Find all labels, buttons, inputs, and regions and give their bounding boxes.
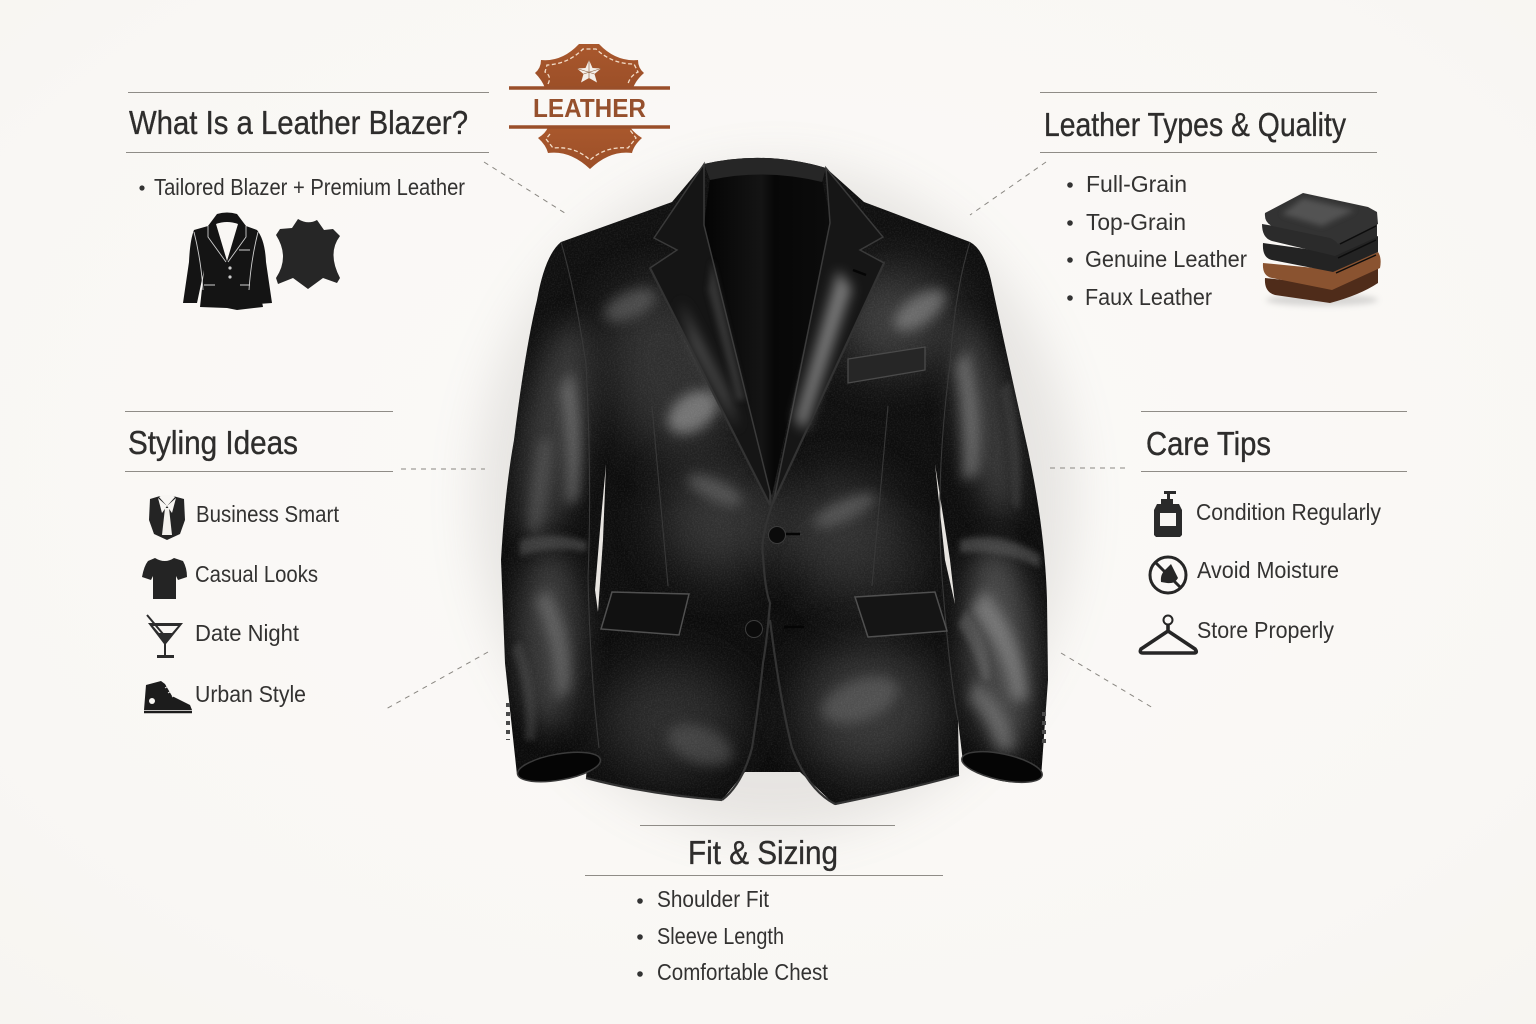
star	[577, 60, 601, 82]
icon: folded leather stack	[1262, 193, 1381, 306]
icon: sneaker	[144, 681, 192, 712]
item: casual looks: Casual Looks	[195, 561, 318, 587]
panel: leather types and quality	[1040, 92, 1381, 310]
jacket shadow	[475, 165, 1075, 835]
text block: Tailored Blazer + Premium Leather	[154, 174, 465, 200]
heading: Fit & Sizing	[688, 834, 838, 871]
item: avoid moisture: Avoid Moisture	[1197, 557, 1339, 583]
item: urban style	[144, 681, 306, 712]
shirt lining	[704, 172, 832, 495]
lapel stitching and front edges	[586, 263, 959, 804]
item: date night	[147, 615, 300, 658]
item: condition regularly: Condition Regularly	[1196, 499, 1381, 525]
leather highlights	[495, 150, 1055, 810]
item: business smart: Business Smart	[196, 501, 340, 527]
list of leather types: Full-Grain	[1086, 171, 1187, 197]
item: store properly	[1140, 616, 1334, 653]
lapel highlights	[680, 260, 852, 430]
leather blazer	[495, 150, 1055, 810]
badge: leather	[509, 44, 670, 169]
panel: care tips	[1140, 412, 1407, 653]
jacket silhouette	[501, 158, 1048, 805]
panel: fit and sizing	[585, 826, 943, 985]
badge top	[535, 44, 644, 88]
list of fit points: Comfortable Chest	[657, 959, 829, 985]
badge bottom	[538, 127, 642, 169]
list of fit points: Shoulder Fit	[657, 886, 770, 912]
item: condition regularly	[1154, 491, 1381, 537]
right cuff opening	[959, 746, 1045, 788]
seams and darts	[561, 242, 970, 748]
item: casual looks	[142, 558, 318, 599]
right pocket flap	[855, 592, 947, 637]
item: urban style: Urban Style	[195, 681, 306, 707]
icon: martini glass	[147, 615, 183, 658]
panel: what is a leather blazer	[126, 92, 489, 310]
item: store properly: Store Properly	[1197, 617, 1334, 643]
icon: t-shirt	[142, 558, 187, 599]
list of fit points: Sleeve Length	[657, 923, 784, 949]
right lapel and collar	[772, 168, 884, 505]
list of leather types: Genuine Leather	[1085, 246, 1247, 272]
broad sheen	[506, 316, 604, 544]
list of leather types: Top-Grain	[1086, 209, 1186, 235]
icon: conditioner bottle	[1154, 491, 1182, 537]
icon: blazer	[183, 212, 272, 310]
heading: Styling Ideas	[128, 424, 298, 461]
icon: no moisture	[1150, 557, 1186, 593]
heading: Care Tips	[1146, 425, 1271, 462]
heading: Leather Types & Quality	[1044, 106, 1346, 143]
item: date night: Date Night	[195, 620, 300, 646]
sleeve buttons	[508, 703, 1044, 748]
list of fit points	[637, 886, 829, 985]
buttons	[746, 270, 866, 638]
badge bars	[509, 88, 670, 127]
stitching	[545, 49, 638, 160]
icon: leather hide	[276, 219, 340, 289]
panel: styling ideas	[125, 412, 393, 712]
connector lines	[386, 162, 1153, 709]
icon: vest and tie	[149, 495, 185, 540]
left lapel and collar	[650, 164, 770, 505]
list of leather types: Faux Leather	[1085, 284, 1212, 310]
left cuff opening	[515, 747, 603, 787]
left pocket flap	[601, 592, 689, 635]
chest pocket	[848, 347, 925, 383]
sleeve gaps	[595, 464, 606, 612]
sharp streaks	[560, 370, 581, 505]
list of leather types	[1067, 171, 1247, 310]
badge word: LEATHER	[533, 93, 646, 123]
collar band	[704, 158, 826, 182]
item: avoid moisture	[1150, 557, 1339, 593]
icon: hanger	[1140, 616, 1196, 653]
item: business smart	[149, 495, 340, 540]
leather grain	[495, 150, 1055, 810]
heading: What Is a Leather Blazer?	[129, 104, 468, 141]
